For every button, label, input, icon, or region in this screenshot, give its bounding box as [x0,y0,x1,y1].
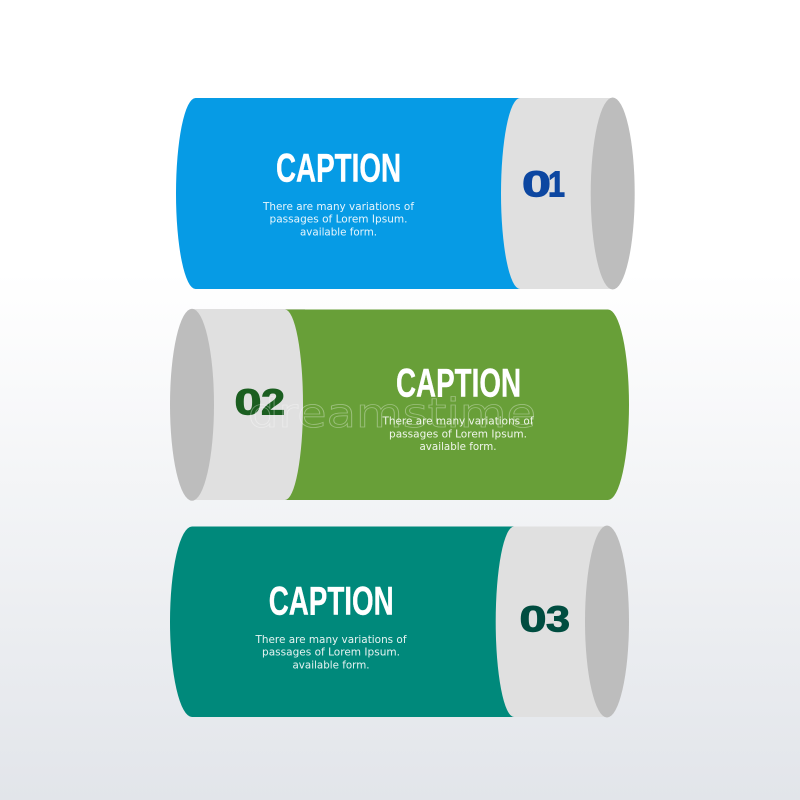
blue label band [176,98,520,289]
watermark: dreamstime [248,391,536,437]
number 02 [234,382,285,422]
number 01: 1 [548,164,565,204]
text block 01: There are many variations of [262,200,415,213]
text block 01: passages of Lorem Ipsum. [270,213,408,226]
teal label band [170,526,514,717]
number 01: 0 [522,164,551,204]
text block 01: available form. [300,226,377,239]
number 03: 0 [520,598,546,640]
panel: cylinder 02 [170,309,629,501]
grey cylinder body 01 [500,98,612,289]
grey cylinder body 02 [192,309,305,500]
text block 02 [382,415,535,453]
text block 02: There are many variations of [382,415,535,428]
text block 03: passages of Lorem Ipsum. [262,646,400,659]
number 02: 0 [234,382,262,422]
green label band [285,310,629,500]
text block 02: passages of Lorem Ipsum. [389,427,527,440]
text block 01 [262,200,415,239]
panel: cylinder 03 [170,526,629,718]
cylinder opening 02 [170,309,214,501]
text block 02: available form. [420,440,496,453]
number 03: 3 [546,598,570,640]
text block 03: There are many variations of [255,633,408,646]
heading: caption 03: CAPTION [269,580,394,624]
cylinder opening 01 [591,98,635,290]
number 02: 2 [261,382,285,422]
panel: cylinder 01 [176,98,635,290]
text block 03: available form. [292,658,370,671]
text block 03 [255,633,408,671]
heading: caption 01: CAPTION [276,147,401,191]
grey cylinder body 03 [495,526,607,717]
cylinder opening 03 [585,526,629,718]
number 01 [522,164,565,204]
number 03 [520,598,570,640]
heading: caption 02: CAPTION [396,362,521,406]
